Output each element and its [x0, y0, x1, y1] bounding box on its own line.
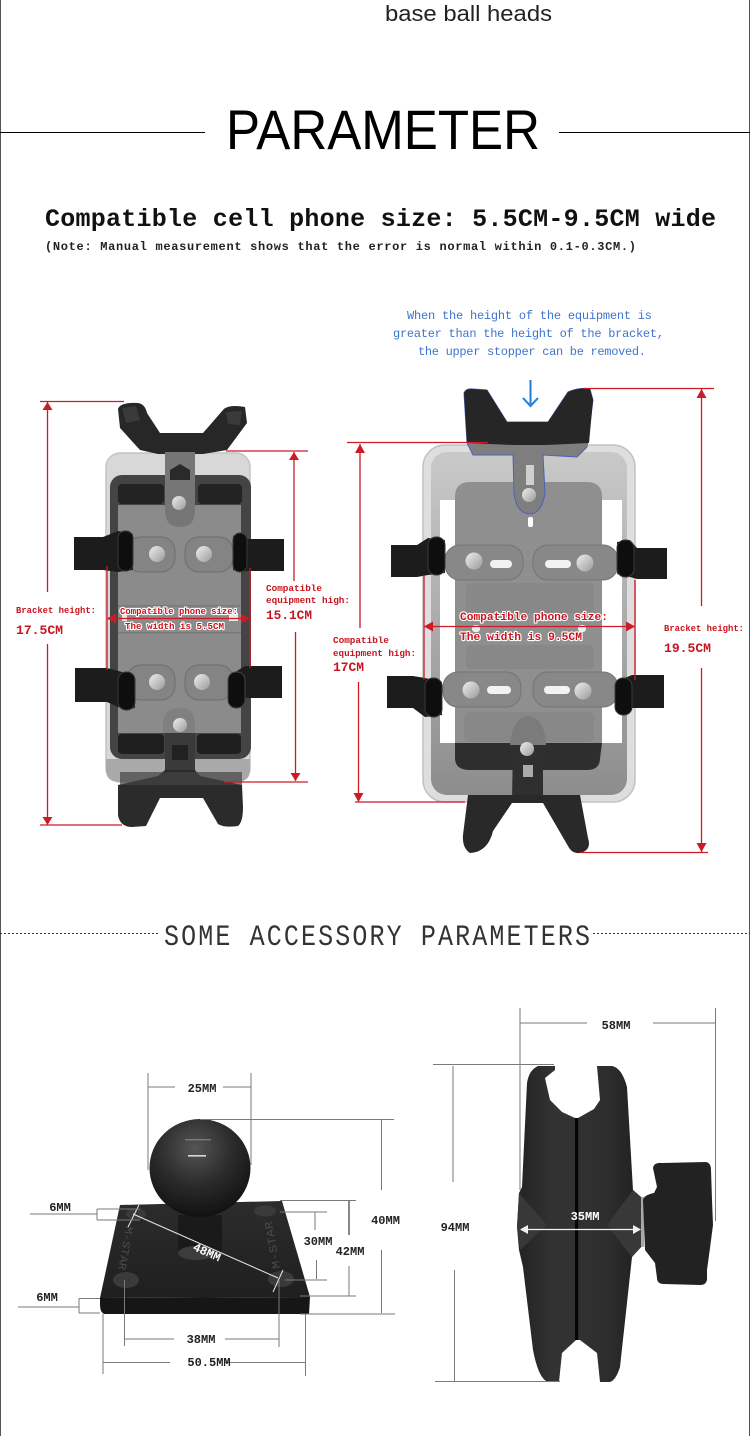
- 38MM: [124, 1280, 279, 1347]
- ball mount base photo: M-STAR: [264, 1220, 284, 1269]
- ball mount base dimensions: 30MM: [304, 1235, 332, 1249]
- bolts: [149, 546, 165, 562]
- ball mount base dimensions: 6MM: [49, 1201, 71, 1215]
- bottom bracket: [463, 795, 589, 853]
- plate recesses: [466, 583, 594, 613]
- right device labels: Compatible: [333, 636, 389, 646]
- left device labels: [16, 584, 350, 638]
- left phone holder photo: [74, 403, 284, 827]
- icon: blue down arrow: [523, 380, 538, 406]
- left device labels: Bracket height:: [16, 606, 96, 616]
- blue removal note: greater than the height of the bracket,: [393, 327, 664, 341]
- right device labels: [333, 612, 744, 675]
- equipment height lines: [347, 442, 488, 802]
- blue removal note: When the height of the equipment is: [407, 309, 652, 323]
- ball mount base dimensions: 25MM: [188, 1082, 216, 1096]
- bracket height lines: [580, 388, 714, 852]
- blue removal note: [393, 309, 664, 359]
- ball mount base dimensions: 42MM: [336, 1245, 364, 1259]
- ball mount base dimensions: 38MM: [187, 1333, 215, 1347]
- bolts: [466, 552, 482, 570]
- clamp arm plates: [127, 537, 175, 572]
- right device labels: Compatible phone size:: [460, 612, 608, 624]
- 94MM: [433, 1064, 560, 1382]
- swivel arm photo: [517, 1066, 713, 1382]
- translucent phone body: [106, 453, 250, 782]
- top bracket: [118, 403, 247, 454]
- clamp: top right: [233, 533, 284, 572]
- neck: [178, 1215, 222, 1258]
- arm bars: [445, 545, 523, 580]
- base plate side: [100, 1297, 310, 1314]
- clamp: bottom right: [228, 666, 282, 708]
- ball mount base dimensions: 40MM: [371, 1214, 400, 1228]
- right device labels: The width is 9.5CM: [460, 632, 582, 644]
- arm centre wedges: [517, 1193, 547, 1250]
- 30MM: [280, 1212, 327, 1280]
- plate embossing: M-STAR: [114, 1225, 134, 1271]
- ball: [150, 1119, 250, 1217]
- 35MM white arrow: [523, 1228, 639, 1230]
- clamp: top left: [74, 531, 133, 572]
- clamp: bottom left: [387, 676, 442, 717]
- left device labels: 17.5CM: [16, 623, 63, 638]
- silver washer: [641, 1197, 644, 1247]
- phone width lines: [107, 566, 250, 670]
- left device labels: equipment high:: [266, 596, 350, 606]
- 58MM: [520, 1008, 716, 1221]
- measurement note: (Note: Manual measurement shows that the error is normal within 0.1-0.3CM.): [45, 240, 636, 254]
- ball mount base photo: [100, 1119, 310, 1314]
- knob: [643, 1162, 713, 1285]
- 35MM label: 35MM: [571, 1210, 599, 1224]
- ball mount base dimensions: 50.5MM: [187, 1356, 231, 1370]
- bottom stem: [163, 708, 195, 733]
- top removable bracket: [464, 388, 593, 514]
- clamp: bottom right: [615, 675, 664, 715]
- mounting holes: [126, 1208, 146, 1220]
- 48MM label: 48MM: [191, 1241, 223, 1265]
- blue removal note: the upper stopper can be removed.: [418, 345, 646, 359]
- arm body: [517, 1066, 643, 1382]
- ball mount base dimensions: [18, 1073, 400, 1376]
- left device labels: 15.1CM: [266, 608, 312, 623]
- swivel arm dimensions: 58MM: [602, 1019, 630, 1033]
- section heading: some accessory parameters: SOME ACCESSORY PARAMETERS: [164, 921, 590, 955]
- 40MM: [200, 1119, 395, 1314]
- right phone holder photo: [387, 388, 667, 853]
- clamp: top left: [391, 538, 445, 577]
- equipment height lines: [224, 451, 308, 782]
- clamp: bottom left: [75, 668, 135, 710]
- bottom bracket: [118, 770, 243, 827]
- right device labels: Bracket height:: [664, 624, 744, 634]
- left device dimension lines: [40, 402, 308, 825]
- phone width lines: [424, 575, 635, 680]
- right device labels: 19.5CM: [664, 641, 711, 656]
- 42MM: [280, 1200, 356, 1296]
- right device labels: 17CM: [333, 660, 364, 675]
- left device labels: Compatible: [266, 584, 322, 594]
- inner dark plate: [110, 475, 251, 759]
- bottom stem: [510, 716, 546, 745]
- right device dimension lines: [347, 388, 714, 852]
- swivel arm dimensions: 94MM: [441, 1221, 469, 1235]
- clamp: top right: [617, 540, 667, 579]
- white screen area: [440, 500, 622, 743]
- swivel arm dimensions: [433, 1008, 716, 1382]
- ball mount base dimensions: 6MM: [36, 1291, 58, 1305]
- hole-to-hole white line: [128, 1205, 283, 1292]
- phone screen: [118, 505, 241, 733]
- black lower plate: [455, 743, 602, 770]
- compatible size headline: Compatible cell phone size: 5.5CM-9.5CM wide: [45, 205, 716, 234]
- 25MM: [148, 1073, 251, 1170]
- top stem: [165, 452, 195, 527]
- centre seam: [575, 1118, 578, 1340]
- left device labels: The width is 5.5CM: [125, 622, 224, 632]
- left device labels: Compatible phone size:: [120, 607, 238, 617]
- 50.5MM: [103, 1314, 306, 1376]
- right device labels: equipment high:: [333, 649, 416, 659]
- base plate top: [100, 1201, 310, 1298]
- backing plate: [455, 482, 602, 770]
- 6MM top: [30, 1209, 140, 1220]
- bracket height lines: [40, 402, 124, 825]
- translucent phone body: [423, 445, 635, 802]
- heading: PARAMETER: PARAMETER: [226, 98, 540, 161]
- 6MM bottom: [18, 1298, 100, 1313]
- centre divider and slots: [118, 605, 241, 606]
- arm slots: [490, 560, 512, 568]
- caption: base ball heads: base ball heads: [385, 1, 552, 26]
